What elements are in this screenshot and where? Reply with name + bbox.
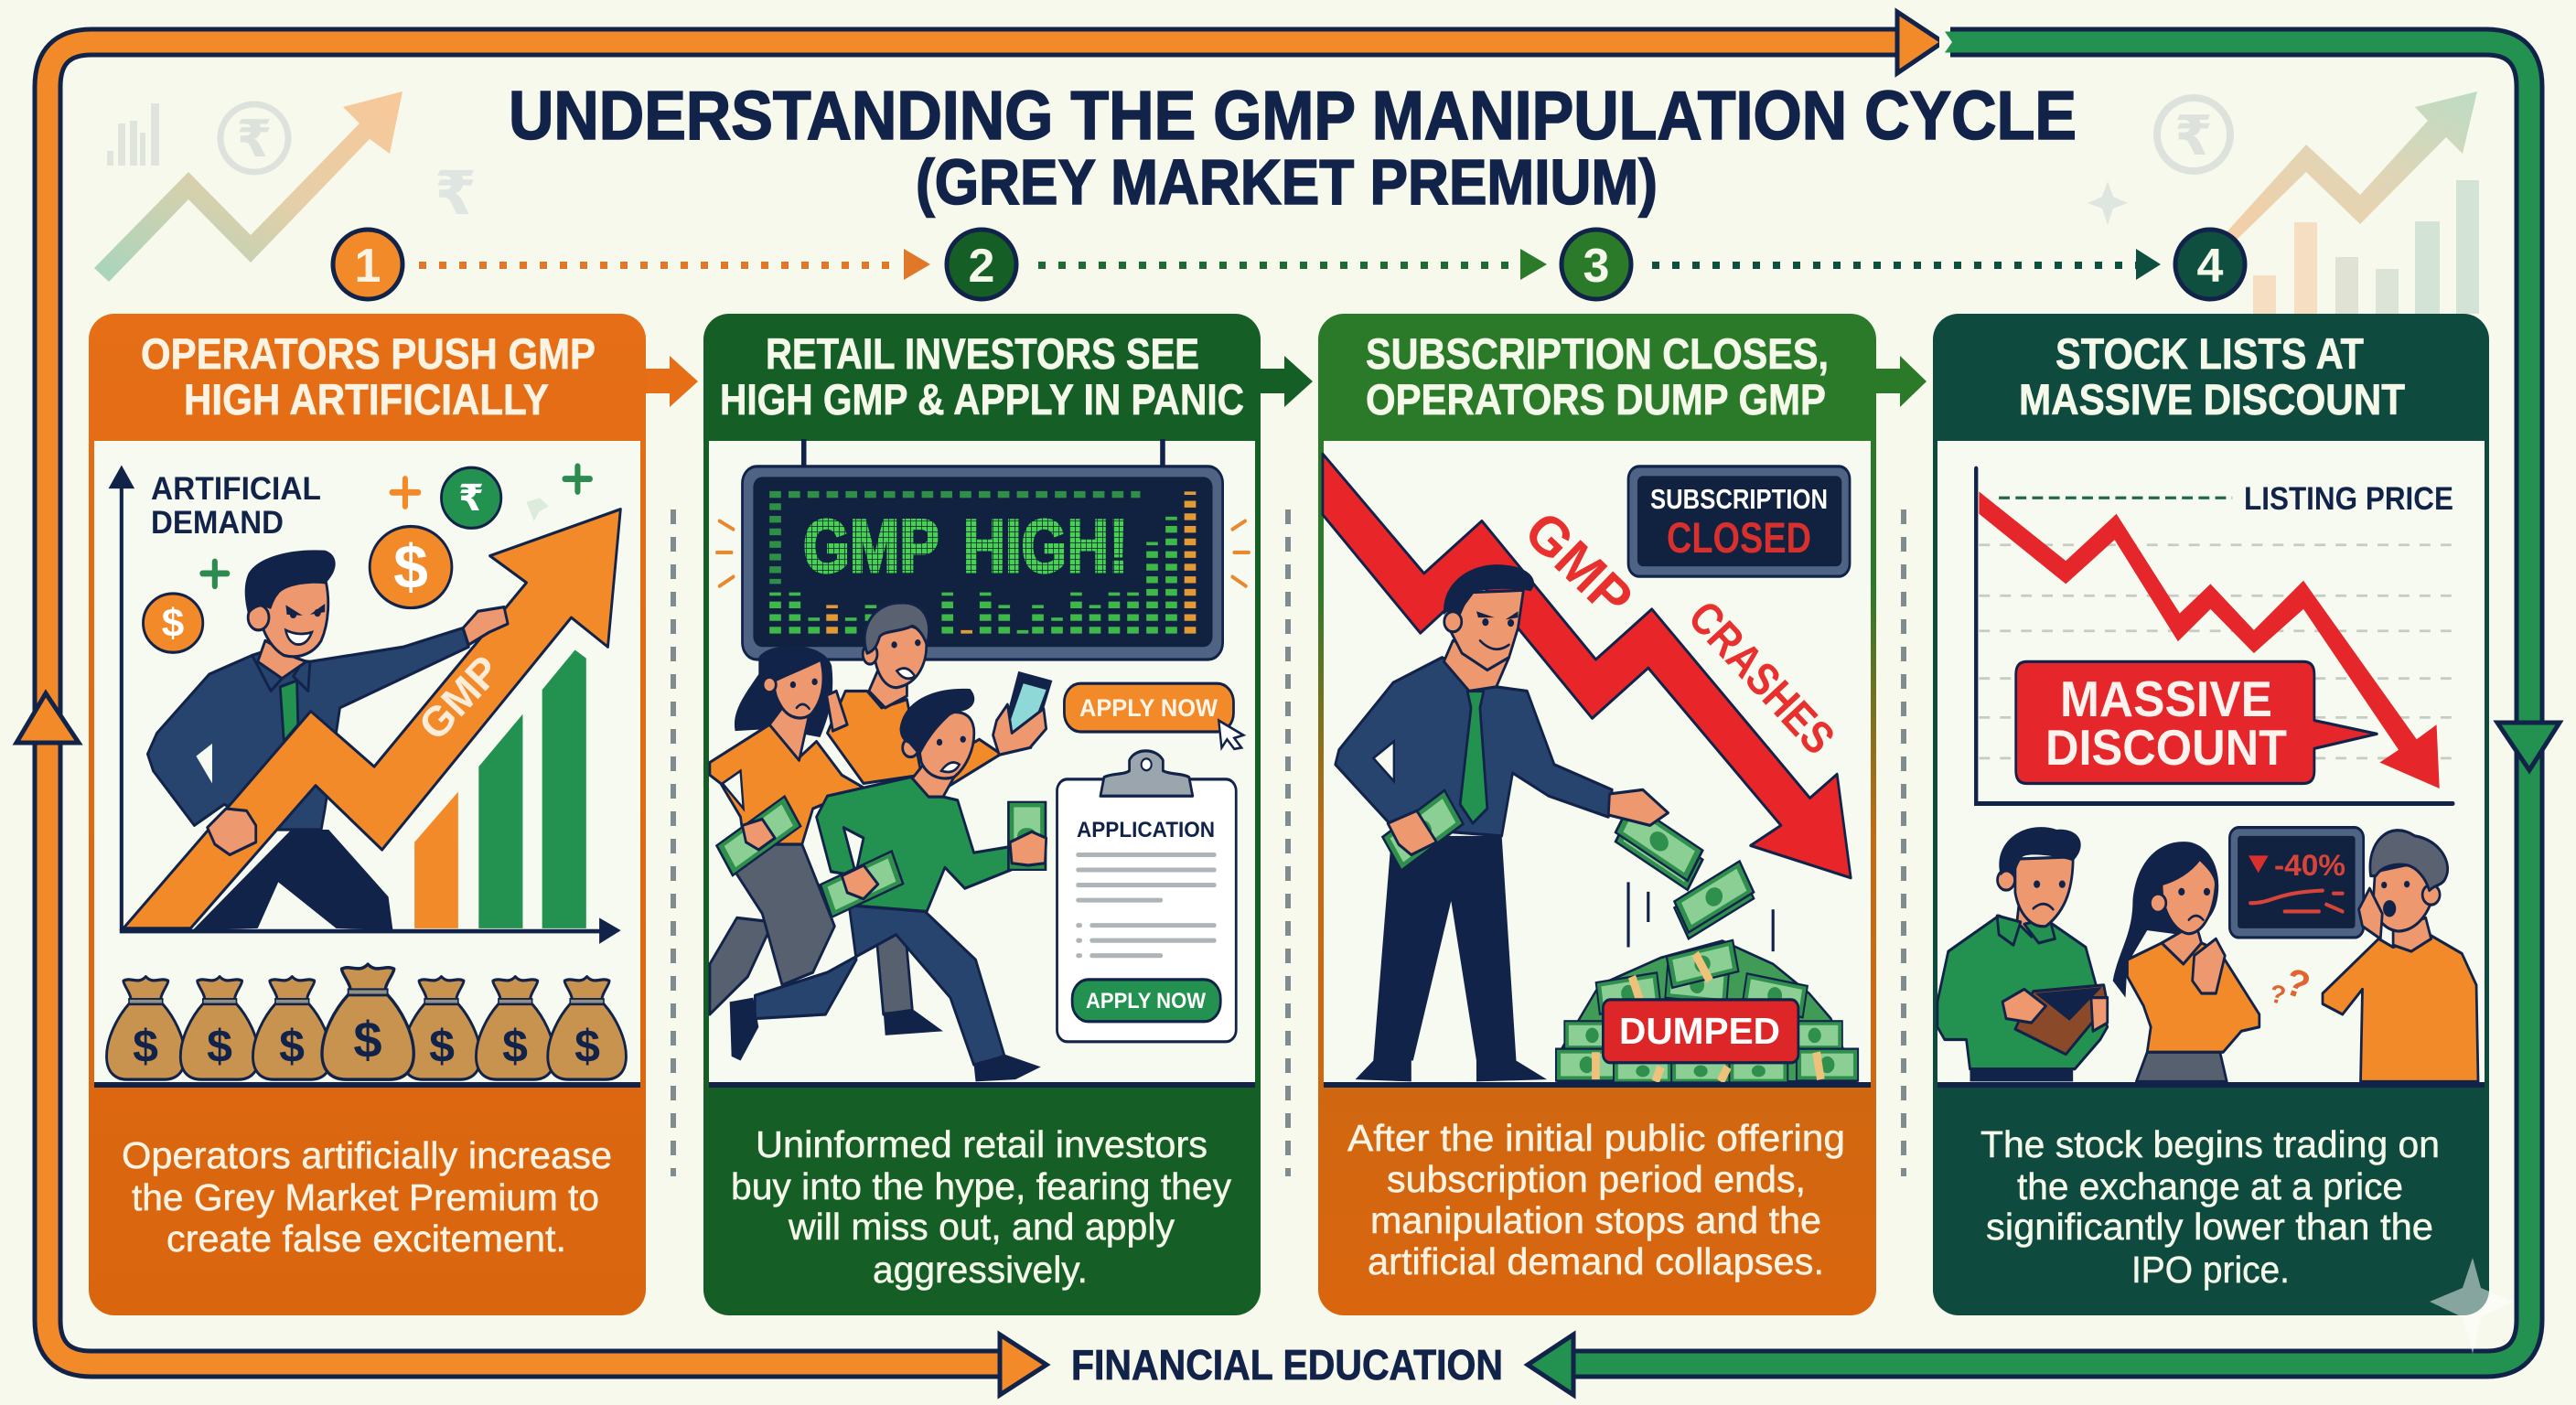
connector arrow 2 [1255,356,1313,407]
sparkle watermark [2430,1258,2514,1354]
heading 3 [1366,329,1829,424]
shocked man [2323,831,2478,1081]
heading 2: RETAIL INVESTORS SEE [766,329,1199,378]
decoration: faded chart left [94,91,477,282]
step number 1: 1 [355,240,381,293]
connector arrow 1 [640,356,698,407]
coin symbols [162,478,484,646]
footer label: FINANCIAL EDUCATION [1071,1341,1503,1389]
body text 3 [1347,1117,1845,1282]
body text 3: artificial demand collapses. [1368,1240,1824,1282]
plus signs [202,467,590,586]
dollar labels: $ [353,1011,382,1068]
step number 1 [333,230,402,299]
massive discount callout [2016,661,2377,783]
money held [1608,789,1702,890]
dollar labels: $ [207,1021,232,1072]
cycle frame: green arrow [1528,24,2560,1395]
rising bars [414,649,586,928]
chart axes [109,465,621,944]
title: (GREY MARKET PREMIUM) [916,146,1658,218]
panel 1: operators push [89,314,646,1315]
body text 4: the exchange at a price [2017,1165,2403,1207]
worried woman [2113,842,2259,1081]
body text 3: subscription period ends, [1387,1158,1806,1200]
heading 1: OPERATORS PUSH GMP [141,329,596,378]
chart axes [1976,468,2453,803]
heading 3: OPERATORS DUMP GMP [1366,375,1826,424]
body text 4 [1980,1123,2440,1291]
body text 2: aggressively. [873,1249,1088,1291]
dashed separator lines [673,509,1904,1176]
arrowhead: top orange [1897,12,1943,73]
dollar labels: $ [574,1021,600,1072]
dollar labels: $ [502,1021,528,1072]
body text 1: create false excitement. [166,1217,566,1260]
body text 4: significantly lower than the [1986,1206,2433,1248]
decoration: faded chart left: ₹ [237,110,272,167]
panel 2: retail investors [703,314,1261,1315]
illustration: panicking investors [710,439,1249,1081]
heading 2 [720,329,1244,424]
heading 1: HIGH ARTIFICIALLY [184,375,549,424]
main orange arrow [123,509,620,928]
form button text: APPLY NOW [1086,989,1206,1014]
illustration: operator dumping [1323,454,1858,1082]
floating coins [144,467,501,652]
hands and head [208,550,508,855]
illustration: operator pushing arrow [107,465,626,1079]
heading 1 [141,329,596,424]
body text 1 [122,1134,612,1260]
label: listing price: LISTING PRICE [2244,481,2453,517]
body text 2 [731,1123,1231,1291]
falling money [1628,861,1773,951]
body text 4: IPO price. [2131,1249,2290,1291]
dollar labels: $ [429,1021,455,1072]
callout text: MASSIVE [2060,670,2272,727]
arrowhead: bottom green [1528,1335,1573,1395]
woman investor [710,646,864,1014]
ground line [1937,1082,2485,1088]
dotted arrow 3 to 4 [1652,249,2161,280]
arrowhead: bottom orange [1000,1335,1046,1395]
body text 3: After the initial public offering [1347,1117,1845,1159]
arrowhead: left up [16,693,79,743]
body text 2: will miss out, and apply [788,1206,1175,1248]
dollar labels [133,1011,600,1072]
clipboard application form [1057,751,1236,1042]
body text 4: The stock begins trading on [1980,1123,2440,1165]
dotted arrow 1 to 2 [419,249,930,280]
money pile [1556,940,1858,1082]
title: UNDERSTANDING THE GMP MANIPULATION CYCLE [509,77,2077,154]
ground line [709,1082,1255,1088]
listing price line [1999,495,2232,501]
heading 4 [2019,329,2405,424]
step number 3 [1562,230,1631,299]
label: artificial demand: DEMAND [151,505,284,541]
LED text: GMP HIGH: GMP [803,505,939,588]
button: apply now orange [1064,683,1243,749]
callout text [2045,670,2287,776]
LED text: GMP HIGH [803,505,1128,588]
question marks: ? [2268,979,2288,1010]
heading 4: STOCK LISTS AT [2055,329,2364,378]
body text 1: Operators artificially increase [122,1134,612,1176]
LED text: GMP HIGH: HIGH! [963,505,1128,588]
decoration: faded chart right: ₹ [2174,105,2213,166]
label: GMP on arrow: GMP [409,647,510,749]
heading 3: SUBSCRIPTION CLOSES, [1366,329,1829,378]
falling red line [1979,491,2440,788]
faint star [527,498,549,521]
button text: apply now: APPLY NOW [1079,694,1218,722]
label: GMP falling: GMP [1513,499,1645,629]
panel 3: subscription closes [1318,314,1876,1315]
label: artificial demand: ARTIFICIAL [151,471,321,507]
subscription closed sign [1628,467,1850,576]
step number 3: 3 [1583,240,1609,293]
body text 2: buy into the hype, fearing they [731,1165,1231,1207]
step number 2 [947,230,1016,299]
dumping operator [1336,564,1612,1081]
illustration: falling chart and investors [1937,468,2478,1081]
label: artificial demand [151,471,321,541]
sign text: subscription: SUBSCRIPTION [1650,483,1828,515]
back man [827,603,1001,1035]
heading 2: HIGH GMP & APPLY IN PANIC [720,375,1244,424]
step number 4 [2175,230,2245,299]
dotted arrow 2 to 3 [1038,249,1547,280]
alert ticks [717,521,1249,586]
panel 4: stock lists at discount [1933,314,2489,1315]
ground line [94,1082,640,1088]
crashing red arrow [1323,454,1851,878]
arrowhead: right down [2497,723,2560,770]
heading 4: MASSIVE DISCOUNT [2019,375,2405,424]
monitor text: -40%: -40% [2274,849,2345,882]
coin symbols: $ [162,601,184,646]
coin symbols: $ [393,532,428,602]
decoration: faded chart left: ₹ [435,159,477,227]
connector arrow 3 [1871,356,1927,407]
dollar labels: $ [279,1021,305,1072]
coin symbols: ₹ [458,478,484,519]
badge text: dumped: DUMPED [1619,1010,1780,1052]
label: crashes: CRASHES [1679,591,1844,764]
phone [993,671,1052,755]
small monitor [2229,828,2364,938]
question marks: ? [2280,960,2315,1007]
step number 2: 2 [969,240,994,293]
man with empty wallet [1937,827,2108,1081]
body text 2: Uninformed retail investors [756,1123,1208,1165]
operator figure [147,628,468,930]
money bags [107,964,626,1079]
ground line [1324,1082,1871,1088]
dollar labels: $ [133,1021,158,1072]
front man [730,689,1046,1081]
decoration: faded chart right [2088,91,2479,314]
sign text: closed: CLOSED [1667,513,1811,562]
LED board [743,439,1223,660]
body text 3: manipulation stops and the [1370,1199,1821,1241]
cycle frame: orange arrow [16,12,1943,1395]
step number 4: 4 [2197,240,2224,293]
body text 1: the Grey Market Premium to [132,1176,599,1218]
dumped badge [1603,1000,1798,1063]
form title: APPLICATION [1077,818,1215,842]
grid lines [1979,545,2453,758]
title [509,77,2077,218]
callout text: DISCOUNT [2045,719,2287,776]
